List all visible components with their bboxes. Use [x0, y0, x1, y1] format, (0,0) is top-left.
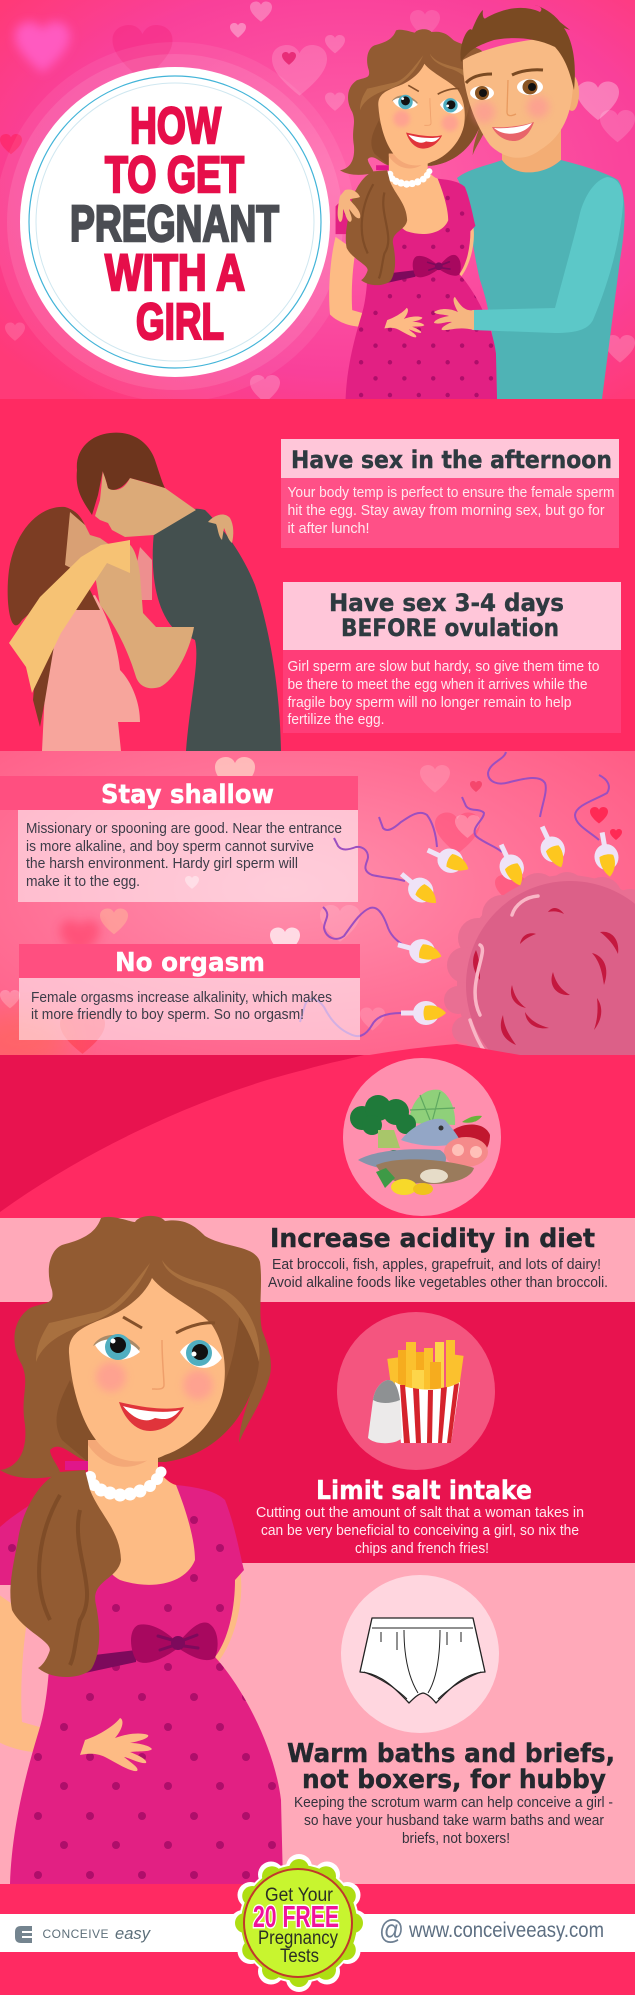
- panel: top tips background: [0, 399, 635, 751]
- panel: food section background: [0, 1044, 635, 1218]
- heading and text: limit salt: chips and french fries!: [355, 1540, 489, 1557]
- title: [70, 97, 279, 350]
- tip box: before ovulation: Have sex 3-4 days: [329, 589, 564, 617]
- badge: 20 free pregnancy tests: [230, 1854, 368, 1992]
- heading and text: limit salt: [256, 1476, 584, 1557]
- fries and salt circle: [337, 1312, 495, 1470]
- tip box: before ovulation: Girl sperm are slow but hardy, so give them time to: [288, 658, 600, 675]
- badge: 20 free pregnancy tests: Tests: [280, 1946, 319, 1967]
- title: GIRL: [136, 293, 224, 350]
- man head: [460, 5, 579, 158]
- badge: 20 free pregnancy tests: Get Your: [265, 1885, 334, 1906]
- website: www.conceiveeasy.com: [408, 1919, 604, 1942]
- sperm cells: [323, 752, 622, 1025]
- tip box: afternoon: Have sex in the afternoon: [291, 446, 612, 474]
- heading and text: increase acidity: Increase acidity in diet: [270, 1224, 595, 1254]
- briefs circle: [341, 1575, 499, 1733]
- tip box: before ovulation: [283, 582, 621, 733]
- panel: briefs section background: [0, 1563, 635, 1884]
- panel: salt section background: [0, 1302, 635, 1563]
- band: increase acidity: [0, 1218, 635, 1302]
- heading and text: increase acidity: Eat broccoli, fish, apples, grapefruit, and lots of dairy!: [272, 1256, 601, 1273]
- box: no orgasm: it more friendly to boy sperm. So no orgasm!: [31, 1006, 304, 1023]
- logo: conceive easy: [15, 1924, 151, 1943]
- panel: hero: [0, 0, 635, 403]
- box: stay shallow: Stay shallow: [101, 780, 274, 810]
- title: PREGNANT: [70, 195, 279, 252]
- tip box: afternoon: it after lunch!: [288, 520, 370, 537]
- illustration: kissing couple: [8, 433, 281, 751]
- title: TO GET: [105, 146, 244, 203]
- title: WITH A: [105, 244, 245, 301]
- heading and text: limit salt: Limit salt intake: [316, 1476, 532, 1506]
- heading and text: warm baths: so have your husband take warm baths and wear: [304, 1812, 604, 1829]
- box: stay shallow: make it to the egg.: [26, 873, 140, 890]
- heading and text: limit salt: can be very beneficial to conceiving a girl, so nix the: [261, 1522, 579, 1539]
- egg: [444, 872, 635, 1055]
- tip box: before ovulation: fragile boy sperm will no longer remain to help: [288, 694, 572, 711]
- box: stay shallow: is more alkaline, and boy sperm cannot survive: [26, 838, 314, 855]
- badge: 20 free pregnancy tests: 20 FREE: [253, 1899, 339, 1934]
- man body: [457, 120, 625, 399]
- logo: conceive easy: easy: [115, 1924, 151, 1943]
- heading and text: warm baths: not boxers, for hubby: [302, 1765, 606, 1795]
- box: no orgasm: No orgasm: [115, 948, 265, 978]
- box: no orgasm: [19, 944, 360, 1040]
- section hearts background: [0, 757, 622, 1070]
- heading and text: warm baths: [287, 1739, 615, 1847]
- man arm and hands: [338, 177, 623, 333]
- heading and text: increase acidity: [268, 1224, 608, 1291]
- website: [379, 1914, 604, 1945]
- panel: sperm and egg section: [0, 751, 635, 1055]
- box: stay shallow: the harsh environment. Hardy girl sperm will: [26, 855, 298, 872]
- heading and text: warm baths: Warm baths and briefs,: [287, 1739, 615, 1769]
- badge: 20 free pregnancy tests: Pregnancy: [258, 1928, 338, 1949]
- box: no orgasm: Female orgasms increase alkalinity, which makes: [31, 989, 332, 1006]
- heading and text: increase acidity: Avoid alkaline foods like vegetables other than broccoli.: [268, 1274, 608, 1291]
- heading and text: warm baths: briefs, not boxers!: [402, 1830, 510, 1847]
- hero hearts background: [0, 2, 635, 403]
- tip box: before ovulation: BEFORE ovulation: [341, 614, 559, 642]
- tip box: afternoon: [281, 439, 619, 548]
- woman illustration: [0, 1216, 283, 1884]
- footer background: [0, 1884, 635, 1995]
- food circle: [343, 1058, 501, 1216]
- title: HOW: [130, 97, 222, 154]
- box: stay shallow: [0, 776, 358, 902]
- heading and text: warm baths: Keeping the scrotum warm can help conceive a girl -: [294, 1794, 613, 1811]
- sperm tail behind box: [300, 999, 401, 1036]
- tip box: afternoon: Your body temp is perfect to ensure the female sperm: [288, 484, 614, 501]
- website: @: [379, 1914, 404, 1945]
- tip box: before ovulation: fertilize the egg.: [288, 711, 384, 728]
- woman in hero: [329, 29, 497, 400]
- box: stay shallow: Missionary or spooning are good. Near the entrance: [26, 820, 342, 837]
- logo: conceive easy: CONCEIVE: [42, 1927, 108, 1941]
- title circle: [20, 67, 330, 377]
- heading and text: limit salt: Cutting out the amount of salt that a woman takes in: [256, 1504, 584, 1521]
- tip box: before ovulation: be there to meet the egg when it arrives while the: [288, 676, 588, 693]
- tip box: afternoon: hit the egg. Stay away from morning sex, but go for: [288, 502, 604, 519]
